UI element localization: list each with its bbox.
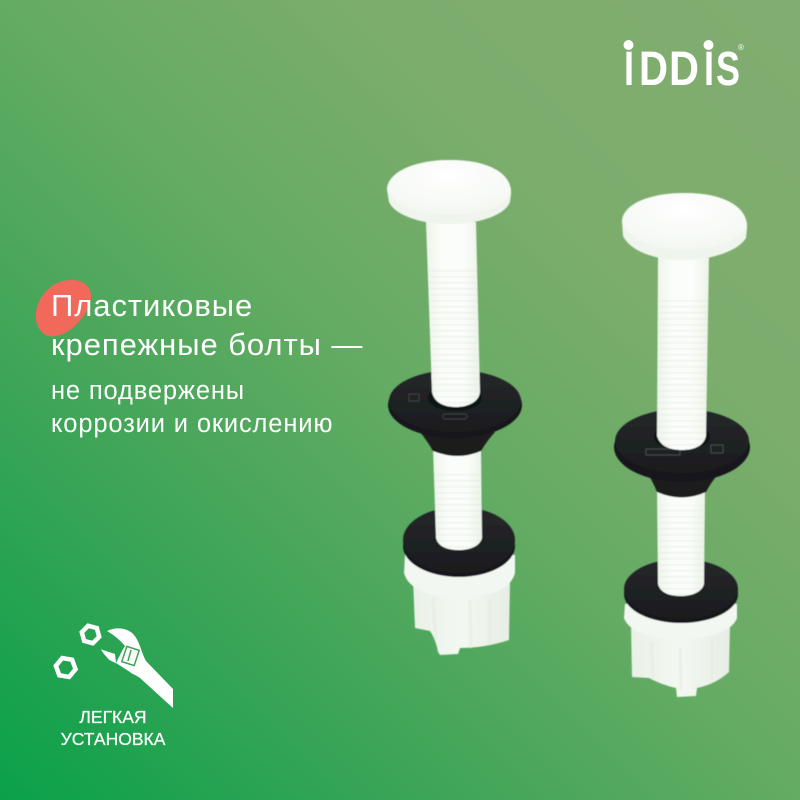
- logo: iddis: ®: [738, 43, 744, 52]
- subheading text: [51, 377, 333, 438]
- icon caption: [60, 707, 166, 749]
- right bolt: [614, 193, 750, 697]
- icon caption: УСТАНОВКА: [61, 729, 165, 749]
- left bolt nut: [404, 555, 515, 655]
- right bolt upper washer: [614, 409, 750, 482]
- subheading text: коррозии и окислению: [51, 410, 333, 438]
- left bolt: [387, 160, 522, 655]
- left bolt lower washer: [403, 507, 515, 577]
- right bolt lower shank: [657, 490, 705, 596]
- left bolt cone: [420, 432, 495, 456]
- left bolt head: [387, 160, 511, 224]
- subheading text: не подвержены: [51, 377, 245, 405]
- heading: крепежные болты —: [51, 327, 363, 362]
- heading: [51, 288, 363, 362]
- right bolt nut: [624, 604, 737, 697]
- left bolt upper washer: [388, 370, 522, 438]
- right bolt upper shank: [657, 256, 709, 450]
- logo: iddis: [624, 40, 744, 90]
- heading: Пластиковые: [51, 288, 253, 323]
- icon caption: ЛЕГКАЯ: [79, 707, 147, 727]
- left bolt lower shank: [433, 448, 482, 550]
- left bolt upper shank: [426, 222, 480, 407]
- right bolt lower washer: [624, 559, 738, 623]
- right bolt head: [622, 193, 747, 260]
- right bolt cone: [648, 474, 718, 498]
